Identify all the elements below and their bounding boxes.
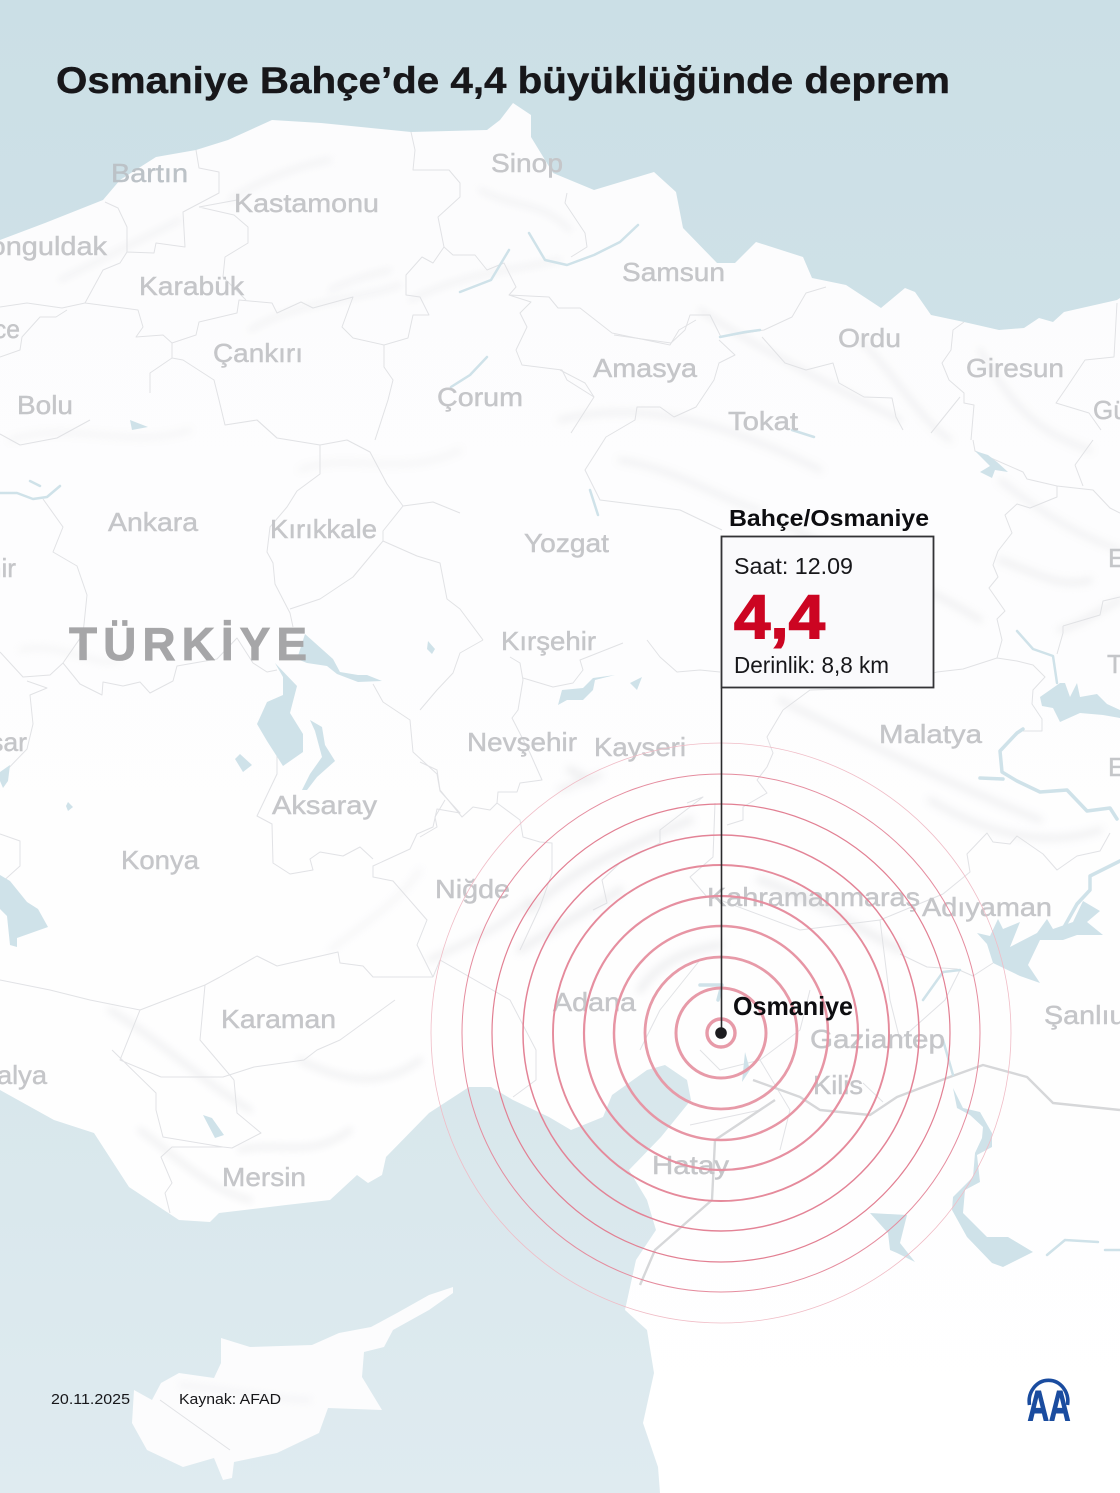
Atatürk reservoir <box>977 901 1103 983</box>
label: Gaziantep: Gaziantep <box>810 1024 945 1054</box>
location label: Osmaniye: Osmaniye <box>733 991 853 1021</box>
label: Karaman: Karaman <box>221 1004 336 1034</box>
national border Turkey–Syria <box>640 1065 1120 1285</box>
label: Kayseri: Kayseri <box>594 732 686 762</box>
Jabbul lake <box>870 1213 915 1262</box>
Aksaray reservoir <box>302 720 335 790</box>
Tuz Lake <box>257 663 303 766</box>
Euphrates reservoir <box>952 1088 1033 1267</box>
rivers and lakes <box>0 225 1120 1267</box>
epicentre rings <box>431 743 1011 1323</box>
icon: AA logo <box>1028 1380 1070 1430</box>
label: Ordu: Ordu <box>838 323 901 353</box>
label: Amasya: Amasya <box>593 353 698 383</box>
label: Çorum: Çorum <box>437 382 523 412</box>
label: Konya: Konya <box>121 845 200 875</box>
label: Kilis: Kilis <box>813 1070 863 1100</box>
label: Sinop: Sinop <box>491 148 563 178</box>
icon: AA logo: AA <box>1028 1382 1070 1430</box>
Hirfanlı reservoir <box>297 634 382 682</box>
depth: Derinlik: 8,8 km <box>734 652 889 678</box>
label: Aksaray: Aksaray <box>272 790 377 820</box>
title: Osmaniye Bahçe’de 4,4 büyüklüğünde deprem <box>56 60 950 101</box>
label: Giresun: Giresun <box>966 353 1064 383</box>
province labels <box>0 148 1120 1192</box>
magnitude: 4,4 <box>734 583 826 652</box>
land: Cyprus <box>132 1287 453 1480</box>
label: Nevşehir: Nevşehir <box>467 727 577 757</box>
date: 20.11.2025 <box>51 1391 130 1408</box>
time: Saat: 12.09 <box>734 553 853 579</box>
label: Bartın: Bartın <box>111 158 188 188</box>
label: Bolu: Bolu <box>17 390 73 420</box>
label: Karabük: Karabük <box>139 271 245 301</box>
label: Mersin: Mersin <box>222 1162 306 1192</box>
label: Samsun: Samsun <box>622 257 725 287</box>
label: Çankırı: Çankırı <box>213 338 303 368</box>
label: Yozgat: Yozgat <box>524 528 610 558</box>
Keban reservoir <box>1040 683 1120 722</box>
label: Adıyaman: Adıyaman <box>922 892 1052 922</box>
country label: Türkiye: TÜRKİYE <box>69 618 307 670</box>
label: Kırşehir: Kırşehir <box>501 626 596 656</box>
leader line from callout to epicentre <box>720 688 722 1033</box>
label: Hatay: Hatay <box>652 1150 729 1180</box>
label: Kahramanmaraş: Kahramanmaraş <box>707 882 920 912</box>
small lakes <box>0 420 1008 1138</box>
label: Kastamonu: Kastamonu <box>234 188 379 218</box>
callout heading: Bahçe/Osmaniye <box>729 505 929 531</box>
source: Kaynak: AFAD <box>179 1391 281 1408</box>
callout: earthquake details <box>722 505 934 688</box>
label: Tokat: Tokat <box>728 406 799 436</box>
label: Adana: Adana <box>553 987 637 1017</box>
label: Ankara: Ankara <box>108 507 199 537</box>
epicentre dot <box>715 1027 727 1039</box>
Eğirdir lake <box>0 875 48 947</box>
callout box <box>722 536 934 688</box>
label: Niğde: Niğde <box>435 874 510 904</box>
label: Kırıkkale: Kırıkkale <box>270 514 377 544</box>
label: Malatya: Malatya <box>879 719 983 749</box>
